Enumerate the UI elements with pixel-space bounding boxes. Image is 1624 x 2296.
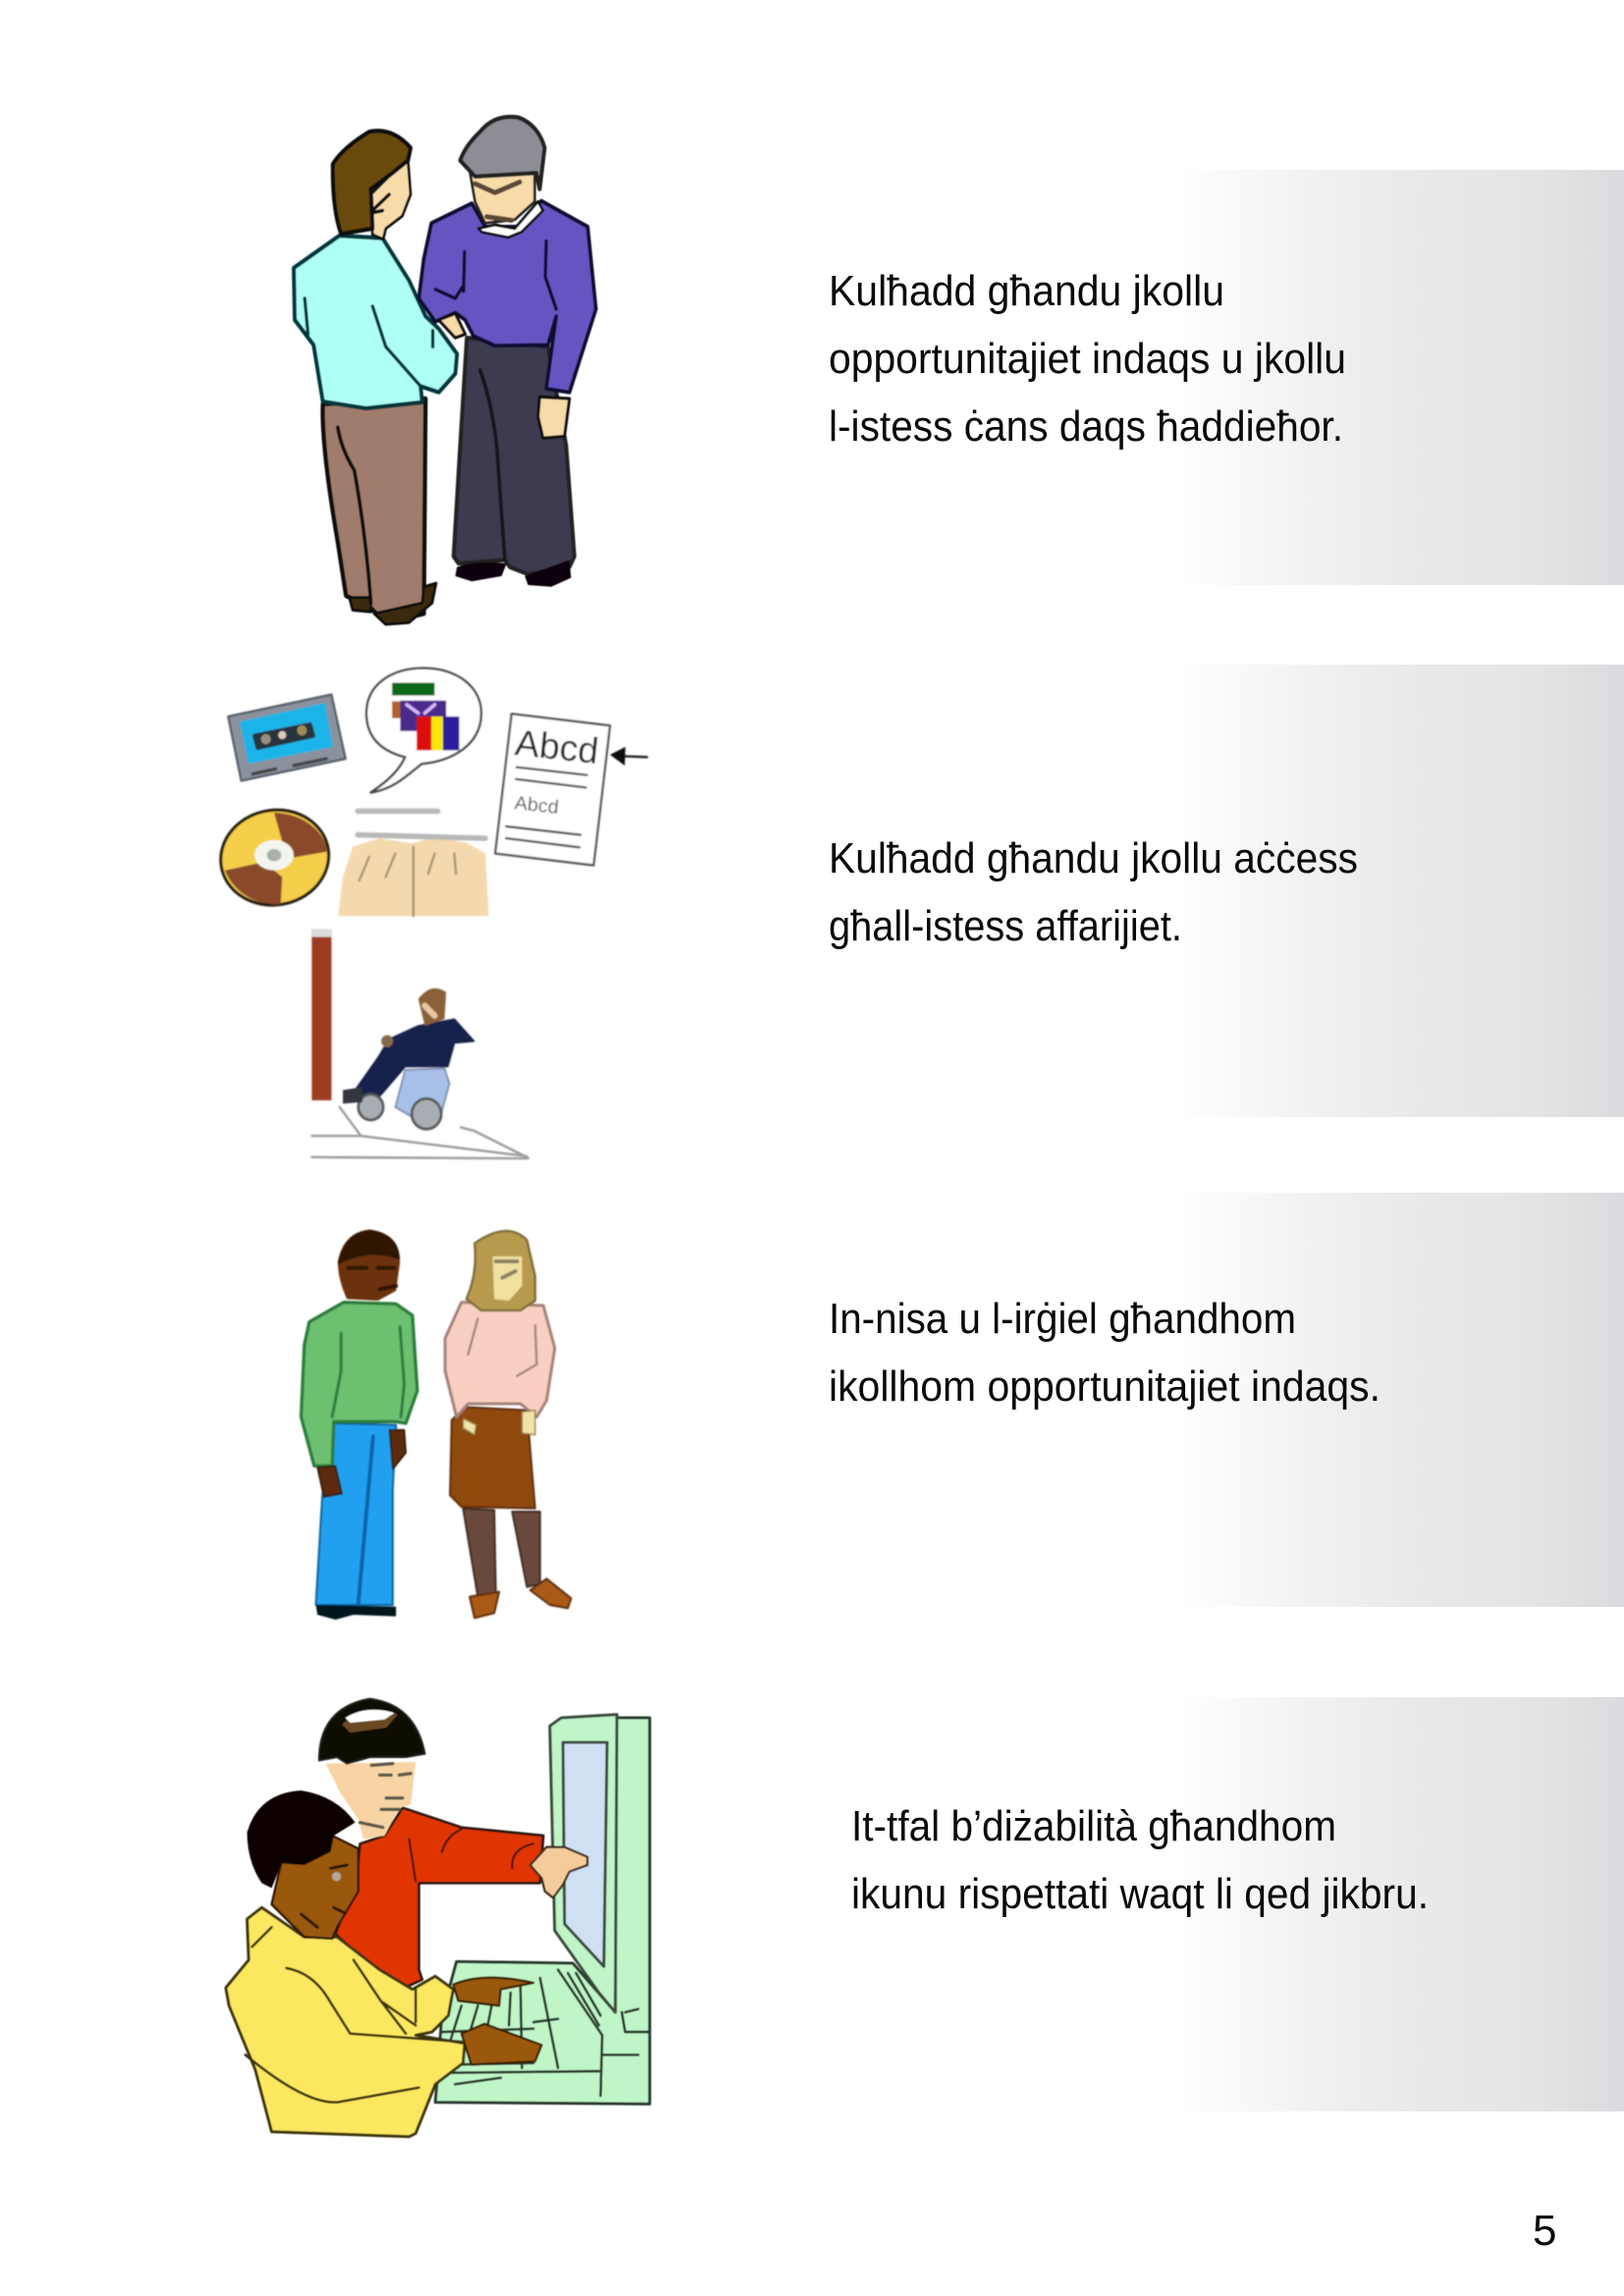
right man trousers [454, 338, 574, 574]
panel: row 2 gradient background [1183, 665, 1624, 1117]
shirt folds [245, 1927, 461, 2103]
left man face [371, 160, 410, 240]
illustration: accessible formats collage [215, 668, 647, 1158]
computer base and keyboard [435, 1718, 650, 2104]
left man shoes [350, 583, 436, 624]
man sweater [301, 1303, 417, 1466]
man trousers [316, 1423, 396, 1605]
woman legs [463, 1509, 540, 1597]
pointing hand [530, 1847, 587, 1897]
woman shoes [469, 1578, 571, 1618]
cassette tape [228, 695, 346, 780]
page number: 5 [1533, 2207, 1556, 2255]
document with Abcd text and arrow [495, 714, 647, 866]
right man shoes [456, 560, 571, 587]
man shoes [316, 1605, 396, 1620]
monitor screen [563, 1742, 607, 1966]
text: row 3: ikollhom opportunitajiet indaqs. [829, 1362, 1380, 1411]
dark boy features [301, 1865, 347, 1927]
left man trouser crease [338, 427, 371, 603]
hands on keyboard [454, 1978, 542, 2064]
man face shadow [349, 1268, 396, 1289]
text: row 1: l-istess ċans daqs ħaddieħor. [829, 402, 1343, 451]
man hair [338, 1230, 400, 1264]
text: row 3: In-nisa u l-irġiel għandhom [829, 1295, 1296, 1343]
yellow shirt boy [226, 1907, 464, 2137]
panel: row 3 gradient background [1183, 1193, 1624, 1607]
right man trouser crease [480, 370, 505, 560]
hair highlight [342, 1710, 398, 1733]
woman face [493, 1256, 522, 1301]
compact disc [215, 803, 335, 912]
keyboard keys [442, 1970, 650, 2096]
right man face [470, 170, 535, 223]
illustration: two boys at a computer [226, 1699, 650, 2137]
right man sweater [419, 201, 596, 393]
document with Abcd text and arrow: Abcd [514, 722, 601, 772]
text: row 3 [829, 1295, 1380, 1411]
right man eye and beard [475, 182, 519, 220]
trouser crease [358, 1436, 373, 1603]
text: row 4 [851, 1802, 1429, 1918]
left man ear and eye [374, 194, 389, 212]
text: row 1: opportunitajiet indaqs u jkollu [829, 335, 1346, 383]
text: row 2: għall-istess affarijiet. [829, 902, 1182, 950]
illustration: two men talking [294, 117, 596, 624]
monitor [550, 1715, 617, 2012]
left man hair [333, 131, 410, 234]
wheelchair user on ramp [311, 930, 528, 1158]
right man hair [460, 117, 545, 189]
right man hands [538, 397, 569, 438]
man head [338, 1230, 400, 1301]
text: row 2 [829, 834, 1358, 950]
woman hands [463, 1411, 535, 1435]
sweater folds [468, 1318, 537, 1376]
text: row 1: Kulħadd għandu jkollu [829, 267, 1224, 315]
left man shirt [294, 236, 457, 408]
text: row 4: It-tfal b’diżabilità għandhom [851, 1802, 1336, 1850]
right man sweater folds [435, 241, 556, 309]
Braille hands [338, 811, 489, 916]
pointing boy hair [319, 1699, 425, 1764]
text: row 1 [829, 267, 1346, 451]
panel: row 4 gradient background [1183, 1697, 1624, 2111]
left man trousers [323, 399, 425, 622]
left man shirt folds [304, 298, 433, 386]
handshake hand [439, 313, 465, 338]
document with Abcd text and arrow: Abcd [514, 793, 560, 819]
illustration: man and woman standing [301, 1230, 571, 1620]
pointing boy neck and face [326, 1762, 415, 1839]
dark boy face [272, 1836, 358, 1939]
man hands [317, 1430, 406, 1497]
dark boy hair [247, 1790, 355, 1888]
sweater folds [332, 1327, 405, 1416]
woman skirt [450, 1407, 535, 1509]
text: row 2: Kulħadd għandu jkollu aċċess [829, 834, 1358, 882]
woman hair [466, 1231, 535, 1310]
right man collar [478, 201, 543, 238]
pointing boy features [360, 1764, 410, 1828]
text: row 4: ikunu rispettati waqt li qed jikbru. [851, 1870, 1429, 1918]
speech bubble with coloured symbols [366, 668, 481, 792]
red jumper boy [336, 1808, 543, 2000]
panel: row 1 gradient background [1183, 170, 1624, 585]
woman sweater [445, 1303, 555, 1416]
